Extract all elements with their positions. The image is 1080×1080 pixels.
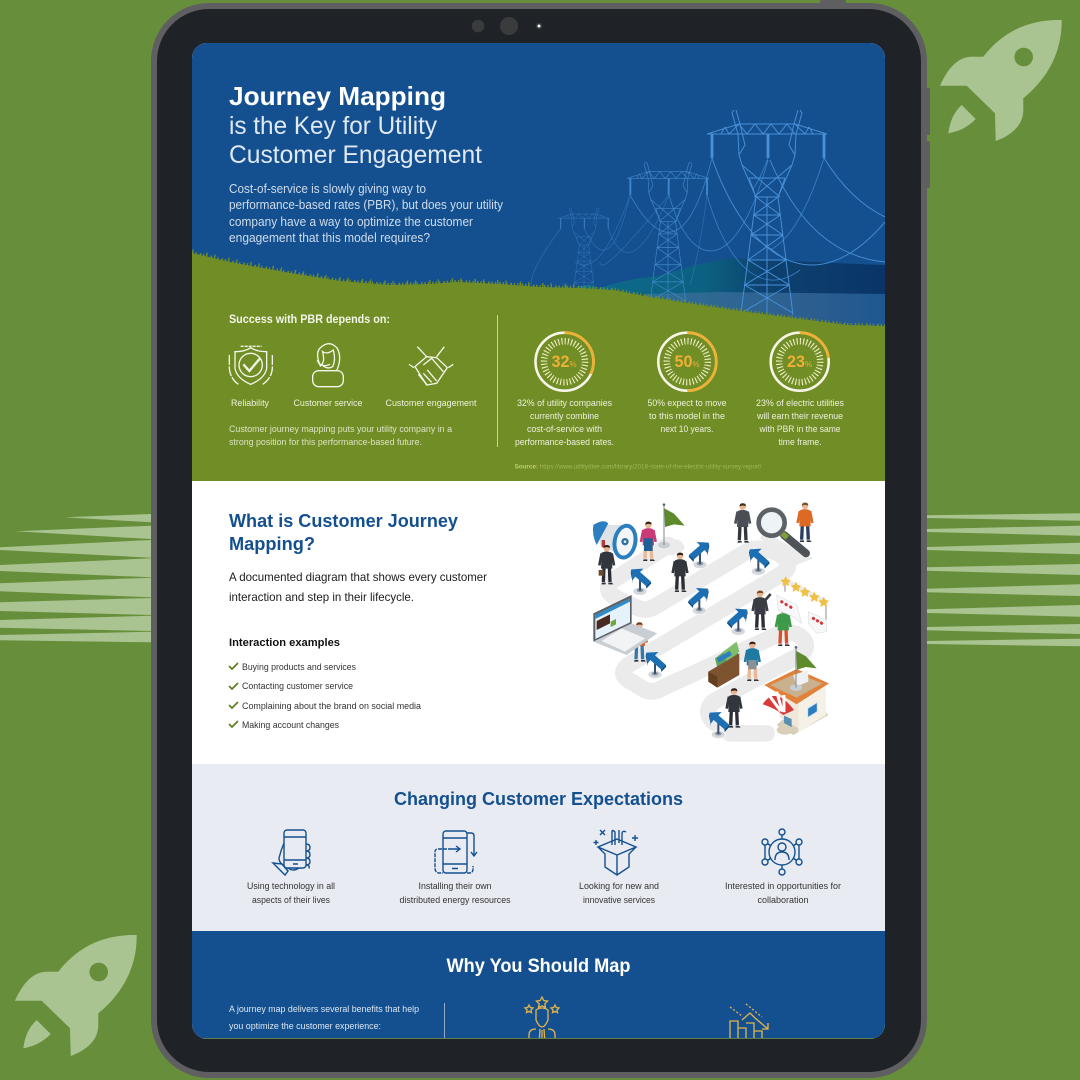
- heading: Changing Customer Expectations: [394, 789, 683, 809]
- caption 50 percent: next 10 years.: [660, 424, 714, 434]
- title: [229, 81, 482, 169]
- road: [608, 545, 806, 733]
- subheading: Success with PBR depends on:: [229, 314, 390, 326]
- definition: interaction and step in their lifecycle.: [229, 590, 414, 604]
- direction signs: [631, 542, 770, 739]
- panel: why you should map: [192, 931, 885, 1044]
- intro paragraph: Cost-of-service is slowly giving way to: [229, 182, 426, 196]
- expectation captions: Looking for new and: [579, 881, 659, 891]
- panel: changing customer expectations: [192, 764, 885, 931]
- wallet: [708, 642, 739, 688]
- laptop: [593, 595, 657, 655]
- tablet screen: [192, 43, 885, 1044]
- flag start: [658, 503, 685, 548]
- expectation captions: [247, 881, 841, 905]
- panel: hero: [192, 43, 885, 482]
- subheading: Interaction examples: [229, 637, 340, 649]
- gauge 50 percent: %: [692, 360, 700, 369]
- source: Source: https://www.utilitydive.com/library/2018-state-of-the-electric-utility-survey-report/: [514, 464, 762, 470]
- caption 32 percent: currently combine: [530, 411, 599, 421]
- icon: open box with sparkles: [594, 830, 638, 875]
- flag finish: [790, 646, 817, 691]
- intro paragraph: company have a way to optimize the customer: [229, 215, 473, 229]
- caption 23 percent: [756, 398, 844, 447]
- expectation captions: Interested in opportunities for: [725, 881, 841, 891]
- title: is the Key for Utility: [229, 112, 437, 140]
- intro text: A journey map delivers several benefits that help: [229, 1004, 419, 1015]
- icon: rocket bottom left: [15, 935, 137, 1056]
- panel: PBR dependencies: [229, 314, 498, 448]
- intro paragraph: [229, 182, 504, 245]
- icon: declining chart: [730, 1004, 768, 1040]
- dependency paragraph: strong position for this performance-based future.: [229, 437, 422, 448]
- intro text: you optimize the customer experience:: [229, 1021, 381, 1032]
- caption 32 percent: performance-based rates.: [515, 437, 614, 447]
- panel: what is customer journey mapping: [192, 481, 885, 764]
- intro text: [229, 1004, 419, 1032]
- definition: [229, 570, 487, 604]
- dependency labels: Customer engagement: [386, 398, 477, 408]
- gauge 23 percent: [771, 333, 829, 391]
- transmission tower large: [707, 110, 827, 315]
- intro paragraph: performance-based rates (PBR), but does your utility: [229, 198, 504, 212]
- gauge 23 percent: 23: [787, 352, 805, 371]
- journey map illustration: [593, 503, 829, 739]
- intro paragraph: engagement that this model requires?: [229, 231, 430, 245]
- icon: shield: [229, 346, 272, 384]
- expectation captions: aspects of their lives: [252, 895, 330, 905]
- megaphone: [593, 521, 640, 562]
- expectation captions: Using technology in all: [247, 881, 335, 891]
- icon: phone with loop: [435, 831, 477, 873]
- checklist: Buying products and services: [242, 662, 356, 672]
- gauge 50 percent: [658, 333, 716, 391]
- screen bottom edge: [192, 1038, 885, 1039]
- caption 32 percent: cost-of-service with: [527, 424, 602, 434]
- caption 23 percent: will earn their revenue: [756, 411, 843, 421]
- expectation captions: distributed energy resources: [400, 895, 511, 905]
- definition: A documented diagram that shows every customer: [229, 570, 487, 584]
- icon: customer service agent: [313, 344, 343, 387]
- expectation captions: collaboration: [758, 895, 808, 905]
- caption 50 percent: [648, 398, 726, 434]
- dependency labels: Reliability: [231, 398, 269, 408]
- left stripe burst: [0, 514, 151, 642]
- checklist: [229, 662, 421, 730]
- icon: hand holding phone: [273, 830, 310, 875]
- dependency labels: [232, 400, 476, 408]
- icon: person with stars: [525, 997, 559, 1044]
- people: [599, 503, 812, 728]
- caption 23 percent: time frame.: [778, 437, 822, 447]
- icon: collaboration network: [762, 829, 802, 875]
- ratings and speech bubbles: [777, 576, 829, 633]
- gauge 32 percent: 32: [552, 352, 570, 371]
- gauge 23 percent: %: [805, 360, 812, 369]
- dependency paragraph: [229, 426, 452, 447]
- right stripe burst: [927, 513, 1080, 646]
- caption 23 percent: 23% of electric utilities: [756, 398, 844, 408]
- heading: Why You Should Map: [446, 956, 630, 977]
- caption 32 percent: [515, 398, 614, 447]
- caption 50 percent: 50% expect to move: [648, 398, 726, 408]
- icon: rocket top right: [940, 20, 1062, 141]
- magnifying glass: [759, 510, 806, 553]
- shop: [763, 669, 829, 735]
- gauge 50 percent: 50: [674, 352, 692, 371]
- gauge 32 percent: %: [570, 360, 577, 369]
- heading: [229, 510, 459, 554]
- heading: Mapping?: [229, 533, 315, 554]
- expectation captions: innovative services: [583, 895, 655, 905]
- dependency paragraph: Customer journey mapping puts your utility company in a: [229, 424, 453, 435]
- heading: What is Customer Journey: [229, 510, 459, 531]
- caption 23 percent: with PBR in the same: [759, 424, 840, 434]
- power lines: [531, 158, 885, 285]
- expectation captions: Installing their own: [418, 881, 492, 891]
- checklist: Contacting customer service: [242, 681, 353, 691]
- panel: statistics: [514, 333, 844, 470]
- transmission tower small: [558, 208, 610, 295]
- caption 32 percent: 32% of utility companies: [517, 398, 612, 408]
- grass: [192, 252, 885, 482]
- hills and water: [565, 258, 885, 330]
- tablet frame: [151, 0, 930, 1078]
- transmission tower medium: [627, 162, 709, 302]
- title: Customer Engagement: [229, 141, 482, 169]
- checklist: Complaining about the brand on social media: [242, 701, 421, 711]
- dependency labels: Customer service: [294, 398, 362, 408]
- icon: handshake: [409, 347, 453, 385]
- checklist: Making account changes: [242, 720, 339, 730]
- title: Journey Mapping: [229, 81, 446, 111]
- caption 50 percent: to this model in the: [649, 411, 725, 421]
- gauge 32 percent: [536, 333, 594, 391]
